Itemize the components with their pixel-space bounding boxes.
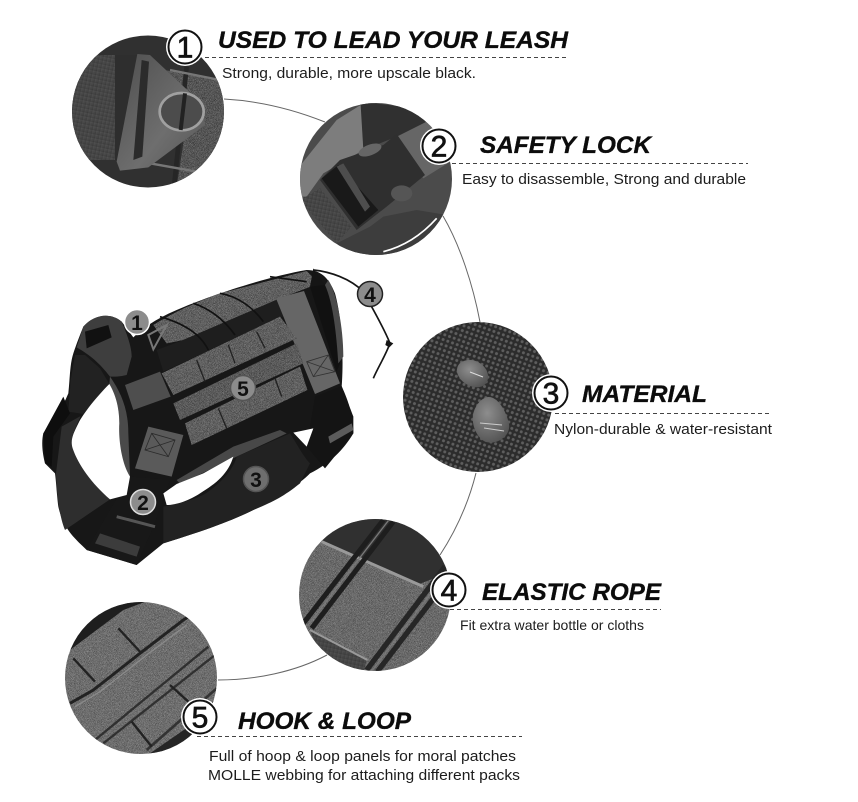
number badge 2: 2 [431,130,447,164]
description 1: Strong, durable, more upscale black. [222,65,476,82]
feature 4 label [430,571,662,633]
description 2: Easy to disassemble, Strong and durable [462,171,746,188]
detail photo 5: hook and loop panels [63,600,220,757]
harness marker 4 [358,282,382,307]
water droplet small [457,360,488,387]
heading 4: ELASTIC ROPE [482,579,662,606]
product illustration: harness [42,268,393,565]
leash ring [148,325,167,349]
small chest tab [135,427,183,477]
detail photo 1: triangle leash ring [70,33,227,190]
belly edge and pad [177,430,287,484]
openings [72,384,130,499]
harness marker 1: 1 [131,312,143,335]
molle patches [125,372,171,410]
detail photo 2: safety lock buckle [300,103,452,255]
harness marker 4: 4 [364,284,376,307]
number badge 1: 1 [177,32,193,64]
number badge 3: 3 [543,378,559,410]
right vertical strap [310,283,340,372]
harness marker 3: 3 [250,469,262,492]
chest buckle strap [87,477,170,565]
number badge 3 [532,374,570,412]
harness marker 5 [230,376,256,401]
detail photo 3: water-resistant nylon [400,320,556,476]
number badge 4 [430,571,468,609]
description 5 [208,748,520,784]
detail photo 4: elastic rope [297,517,453,673]
number badge 5: 5 [192,702,208,734]
side clips [43,397,70,467]
heading 1: USED TO LEAD YOUR LEASH [218,27,569,54]
description 3: Nylon-durable & water-resistant [554,421,773,438]
feature 5 label [181,698,522,784]
upper back panel [153,271,319,343]
water droplet large [473,397,509,443]
description 5: Full of hoop & loop panels for moral patches [209,748,516,765]
harness marker 1 [124,310,150,335]
description 5: MOLLE webbing for attaching different packs [208,767,520,784]
number badge 5 [181,698,219,736]
harness marker 3 [244,466,268,492]
feature 1 label [166,27,569,82]
heading 3: MATERIAL [582,381,707,408]
number badge 4: 4 [441,574,457,608]
elastic rope cord [313,270,390,378]
heading 2: SAFETY LOCK [480,132,653,159]
number badge 1 [166,28,204,66]
feature 3 label [532,374,773,438]
harness silhouette [42,270,353,565]
feature 2 label [420,127,748,188]
harness marker 2: 2 [137,492,149,515]
number badge 2 [420,127,458,165]
harness marker 5: 5 [237,378,249,401]
description 4: Fit extra water bottle or cloths [460,617,644,633]
connecting arc line [218,99,480,680]
harness marker 2 [130,490,156,515]
heading 5: HOOK & LOOP [238,708,412,735]
neck collar [77,316,132,377]
